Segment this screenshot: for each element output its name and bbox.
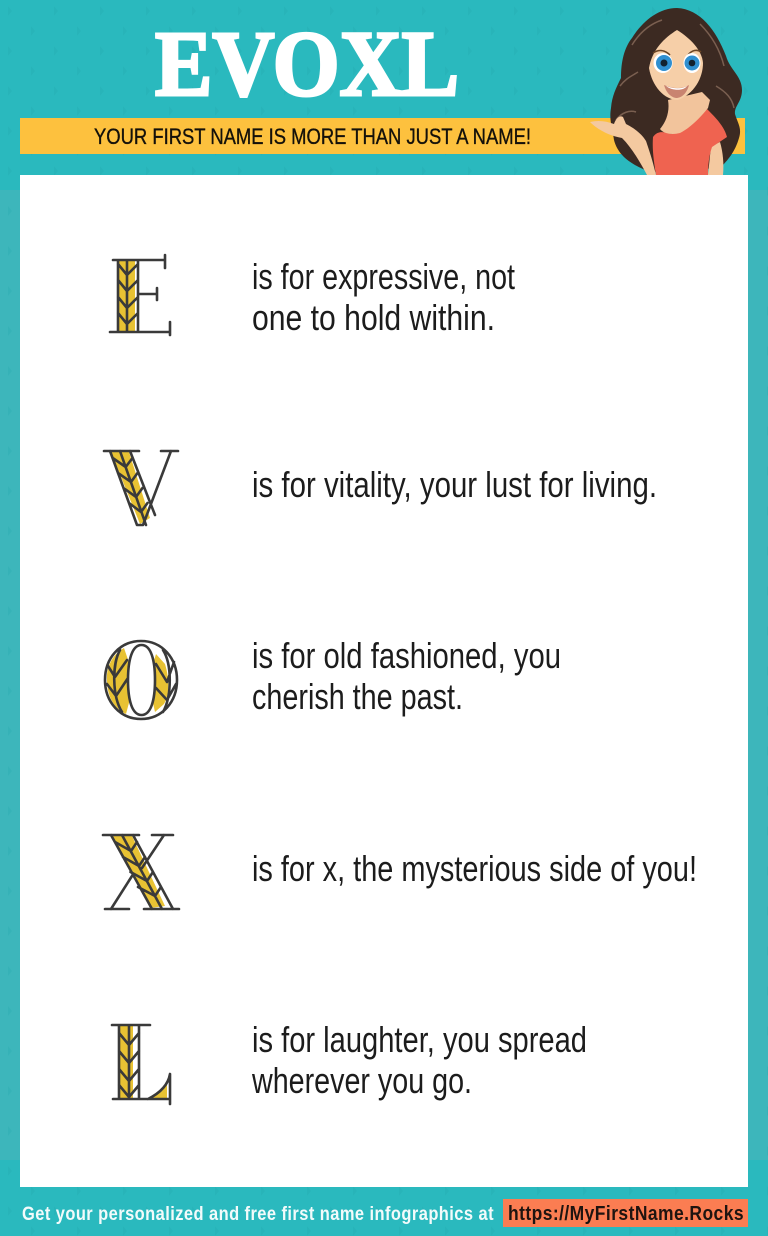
right eye (684, 53, 700, 73)
text: L (251, 1019, 587, 1101)
row X (103, 835, 697, 909)
text: E: is for expressive, not (252, 256, 515, 297)
mouth (664, 85, 689, 98)
left eye (654, 53, 672, 73)
neck and chest (660, 92, 710, 134)
text: O: is for old fashioned, you (252, 635, 561, 676)
character illustration (590, 8, 742, 175)
footer text: Get your personalized and free first name infographics at (22, 1204, 494, 1225)
eyebrows (653, 50, 701, 55)
text: V: is for vitality, your lust for living. (252, 464, 657, 505)
icon: letter V (104, 451, 178, 525)
shirt (653, 109, 727, 175)
arm and hand (590, 116, 656, 175)
content panel (20, 175, 748, 1187)
icon: letter E (110, 255, 170, 335)
hair (610, 8, 742, 172)
row O (105, 635, 561, 719)
right arm (708, 142, 723, 175)
icon: letter X (103, 835, 179, 909)
text: E: one to hold within. (252, 297, 495, 338)
text: O (252, 635, 561, 717)
text: L: is for laughter, you spread (252, 1019, 587, 1060)
row E (110, 255, 515, 338)
face (649, 30, 703, 100)
icon: letter L (112, 1025, 170, 1104)
text: O: cherish the past. (252, 676, 463, 717)
subtitle banner: YOUR FIRST NAME IS MORE THAN JUST A NAME! (94, 124, 531, 149)
text: E (252, 256, 515, 338)
icon: letter O (105, 641, 177, 719)
text: L: wherever you go. (251, 1060, 472, 1101)
subtitle banner (20, 118, 745, 154)
row L (112, 1019, 587, 1104)
row V (104, 451, 657, 525)
title: EVOXL (155, 13, 459, 116)
